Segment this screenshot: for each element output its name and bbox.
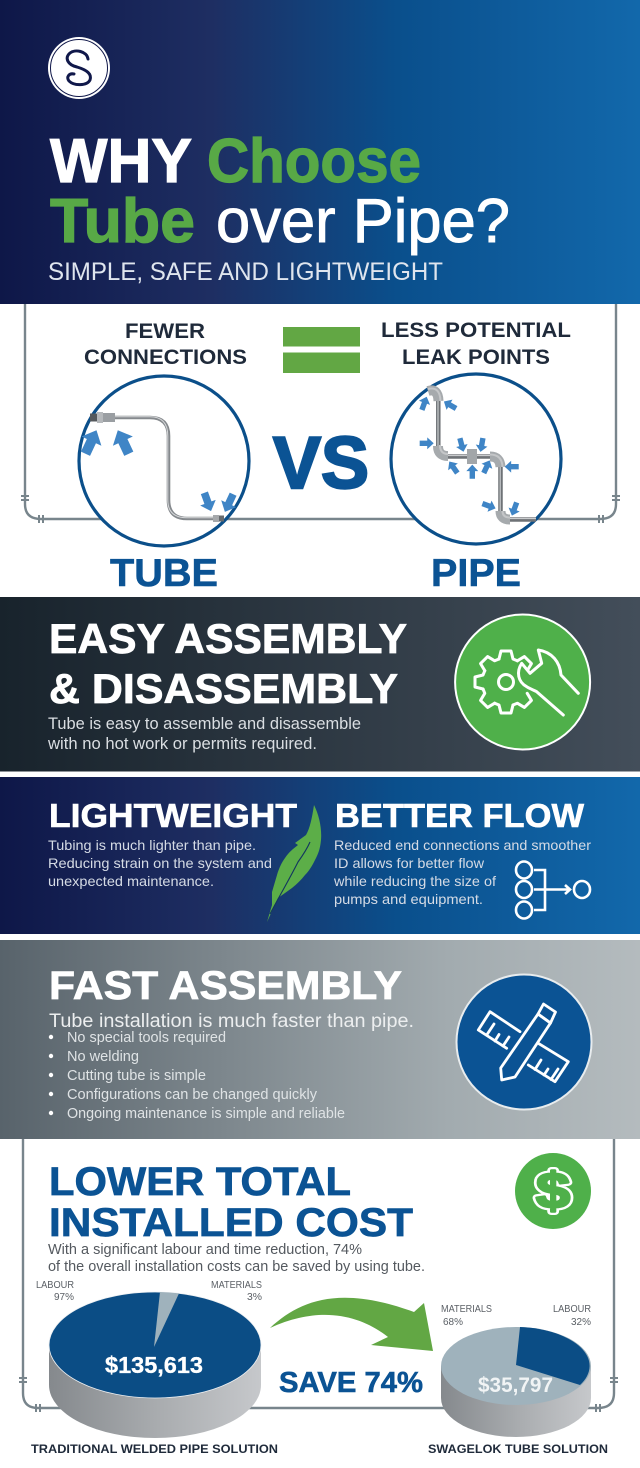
heading: fewer connections xyxy=(84,320,247,369)
panel: lower total installed cost xyxy=(19,1139,618,1456)
heading: lower total installed cost: INSTALLED COST xyxy=(49,1201,413,1245)
body text: better flow xyxy=(333,837,591,907)
labels: tube pie chart: LABOUR xyxy=(553,1304,591,1315)
heading: fewer connections: FEWER xyxy=(125,320,205,343)
panel: fast assembly xyxy=(0,940,640,1139)
caption: traditional welded pipe solution: TRADITIONAL WELDED PIPE SOLUTION xyxy=(31,1442,278,1456)
labels: pipe pie chart: LABOUR xyxy=(36,1280,74,1291)
labels: pipe pie chart xyxy=(36,1280,262,1303)
heading: less potential leak points xyxy=(381,319,571,369)
title: Tube xyxy=(50,187,195,256)
labels: pipe pie chart: MATERIALS xyxy=(211,1280,262,1291)
body text: lightweight: unexpected maintenance. xyxy=(48,873,214,889)
title xyxy=(50,127,510,256)
heading: VS: VS xyxy=(273,423,369,504)
icon: dollar sign: $ xyxy=(536,1163,570,1219)
heading: easy assembly and disassembly xyxy=(49,615,407,712)
body text: better flow: Reduced end connections and smoother xyxy=(334,837,591,853)
title: over Pipe? xyxy=(216,187,510,256)
body text: lightweight xyxy=(48,837,272,889)
heading: fast assembly: FAST ASSEMBLY xyxy=(49,964,402,1008)
body text: of the overall installation costs can be saved by using tube. xyxy=(48,1258,425,1275)
icon: feather xyxy=(267,805,321,922)
bullet list: Cutting tube is simple xyxy=(67,1068,206,1084)
caption: swagelok tube solution: SWAGELOK TUBE SOLUTION xyxy=(428,1442,608,1456)
body text: with no hot work or permits required. xyxy=(47,735,317,753)
body text: lightweight: Tubing is much lighter than pipe. xyxy=(48,837,256,853)
arrow: savings xyxy=(270,1298,433,1351)
diagram: pipe circle xyxy=(391,374,561,544)
bullet list: Configurations can be changed quickly xyxy=(67,1087,318,1103)
heading: better flow: BETTER FLOW xyxy=(335,798,584,835)
bullet list: No special tools required xyxy=(67,1030,226,1046)
heading: easy assembly and disassembly: EASY ASSEMBLY xyxy=(49,615,407,662)
labels: pipe pie chart: 3% xyxy=(247,1292,262,1303)
label: tube: TUBE xyxy=(110,552,218,595)
body text xyxy=(48,1241,425,1275)
labels: tube pie chart xyxy=(441,1304,591,1328)
bullet list xyxy=(49,1030,345,1122)
panel: tube vs pipe xyxy=(21,304,620,595)
tube line xyxy=(90,417,224,518)
heading: lower total installed cost xyxy=(49,1160,413,1245)
heading: lower total installed cost: LOWER TOTAL xyxy=(49,1160,351,1204)
pipe frame xyxy=(19,1139,618,1412)
panel: header xyxy=(0,0,640,304)
panel: lightweight and better flow xyxy=(0,777,640,934)
pie chart: swagelok tube xyxy=(441,1327,591,1437)
labels: tube pie chart: 32% xyxy=(571,1317,591,1328)
icon: Swagelok S logo xyxy=(48,37,110,99)
body text: better flow: pumps and equipment. xyxy=(334,891,483,907)
body text: With a significant labour and time reduction, 74% xyxy=(48,1241,362,1258)
body text: Tube is easy to assemble and disassemble xyxy=(48,715,361,733)
callout: save 74%: SAVE 74% xyxy=(279,1367,423,1399)
pie chart: traditional welded pipe xyxy=(49,1292,261,1438)
labels: tube pie chart: MATERIALS xyxy=(441,1304,492,1315)
label: pipe: PIPE xyxy=(431,552,521,595)
panel: easy assembly xyxy=(0,597,640,772)
body text xyxy=(47,715,361,753)
heading: lightweight: LIGHTWEIGHT xyxy=(49,798,298,835)
pipe frame xyxy=(21,304,620,523)
title: WHY xyxy=(50,127,192,196)
labels: pipe pie chart: 97% xyxy=(54,1292,74,1303)
heading: fewer connections: CONNECTIONS xyxy=(84,346,247,369)
leak arrows xyxy=(416,395,522,518)
bullet list: No welding xyxy=(67,1049,139,1065)
pie chart: traditional welded pipe: $135,613 xyxy=(105,1352,203,1378)
heading: less potential leak points: LESS POTENTIAL xyxy=(381,319,571,342)
leak arrows xyxy=(76,426,241,515)
icon: pencil and ruler xyxy=(456,974,592,1110)
body text: lightweight: Reducing strain on the system and xyxy=(48,855,272,871)
bullet list: Ongoing maintenance is simple and reliable xyxy=(67,1106,345,1122)
heading: easy assembly and disassembly: & DISASSEMBLY xyxy=(49,665,398,712)
labels: tube pie chart: 68% xyxy=(443,1317,463,1328)
icon: equals sign xyxy=(283,327,360,373)
body text: better flow: ID allows for better flow xyxy=(334,855,485,871)
pie chart: swagelok tube: $35,797 xyxy=(478,1373,553,1397)
diagram: tube circle xyxy=(76,376,249,546)
icon: dollar sign: $ xyxy=(536,1163,570,1219)
icon: flow diagram xyxy=(516,862,590,918)
heading: less potential leak points: LEAK POINTS xyxy=(402,346,550,369)
icon: gear and wrench xyxy=(455,614,590,750)
lead text: Tube installation is much faster than pipe. xyxy=(49,1011,414,1032)
subtitle: SIMPLE, SAFE AND LIGHTWEIGHT xyxy=(48,258,443,286)
icon: dollar sign xyxy=(515,1153,591,1229)
pipe line xyxy=(428,388,536,520)
body text: better flow: while reducing the size of xyxy=(333,873,496,889)
title: Choose xyxy=(207,127,421,196)
